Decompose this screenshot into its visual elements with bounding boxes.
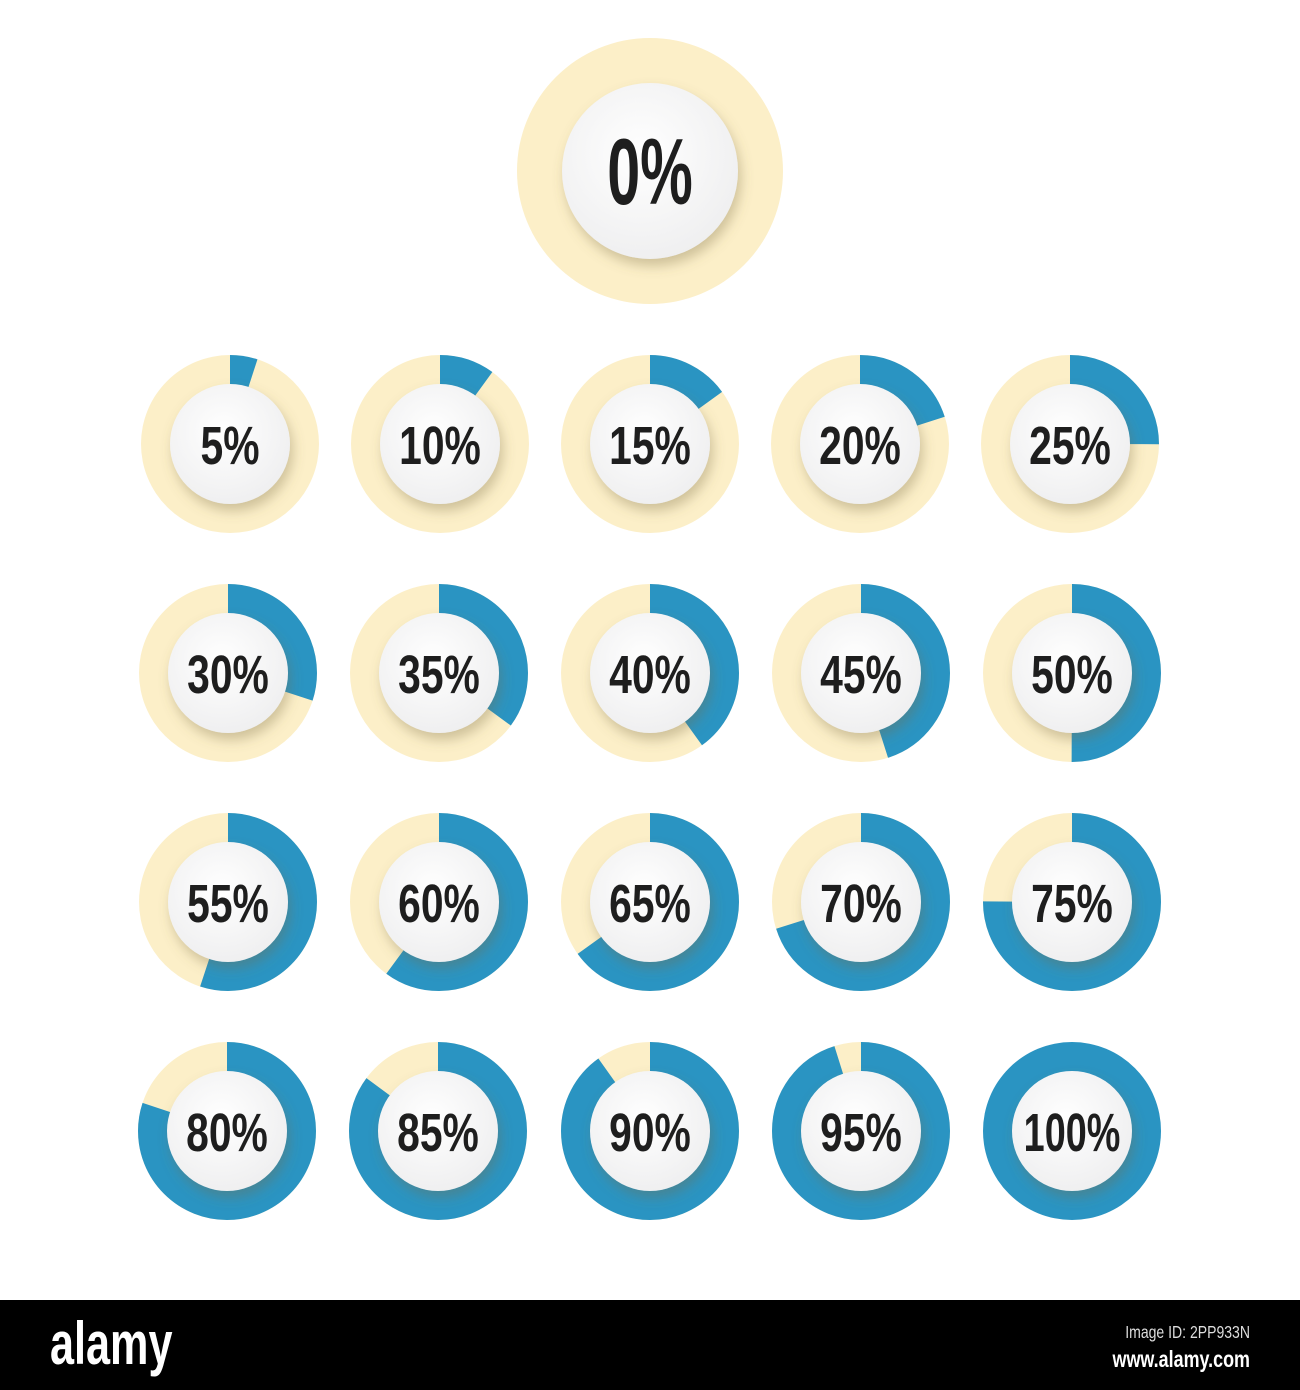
- footer logo: alamy: [50, 1311, 172, 1378]
- chart: 15%: [561, 355, 739, 533]
- chart: 75%: [983, 813, 1161, 991]
- chart: 20%: 20%: [819, 417, 901, 476]
- footer id text: Image ID: 2PP933N: [1125, 1322, 1250, 1342]
- chart: 95%: [772, 1042, 950, 1220]
- chart: 85%: 85%: [397, 1104, 479, 1163]
- chart: 25%: 25%: [1029, 417, 1111, 476]
- chart: 100%: 100%: [1024, 1102, 1120, 1163]
- footer bar: [0, 1300, 1300, 1390]
- chart: 25%: [981, 355, 1159, 533]
- chart: 80%: 80%: [186, 1104, 268, 1163]
- chart: 65%: [561, 813, 739, 991]
- chart: 55%: [139, 813, 317, 991]
- chart: 55%: 55%: [187, 875, 269, 934]
- chart: 0%: 0%: [607, 119, 693, 224]
- chart: 70%: [772, 813, 950, 991]
- chart: 0%: [517, 38, 783, 304]
- chart: 5%: [141, 355, 319, 533]
- chart: 90%: 90%: [609, 1104, 691, 1163]
- chart: 30%: [139, 584, 317, 762]
- chart: 20%: [771, 355, 949, 533]
- chart: 35%: 35%: [398, 646, 480, 705]
- chart: 10%: [351, 355, 529, 533]
- chart: 5%: 5%: [201, 417, 259, 476]
- chart: 50%: [983, 584, 1161, 762]
- chart: 85%: [349, 1042, 527, 1220]
- chart: 30%: 30%: [187, 646, 269, 705]
- chart: 65%: 65%: [609, 875, 691, 934]
- chart: 45%: 45%: [820, 646, 902, 705]
- chart: 35%: [350, 584, 528, 762]
- chart: 10%: 10%: [399, 417, 481, 476]
- chart: 75%: 75%: [1031, 875, 1113, 934]
- chart: 40%: [561, 584, 739, 762]
- chart: 80%: [138, 1042, 316, 1220]
- chart: 45%: [772, 584, 950, 762]
- chart: 70%: 70%: [820, 875, 902, 934]
- chart: 100%: [983, 1042, 1161, 1220]
- footer url: www.alamy.com: [1112, 1347, 1250, 1373]
- chart: 60%: [350, 813, 528, 991]
- chart: 15%: 15%: [609, 417, 691, 476]
- chart: 60%: 60%: [398, 875, 480, 934]
- chart: 50%: 50%: [1031, 646, 1113, 705]
- chart: 90%: [561, 1042, 739, 1220]
- chart: 40%: 40%: [609, 646, 691, 705]
- chart: 95%: 95%: [820, 1104, 902, 1163]
